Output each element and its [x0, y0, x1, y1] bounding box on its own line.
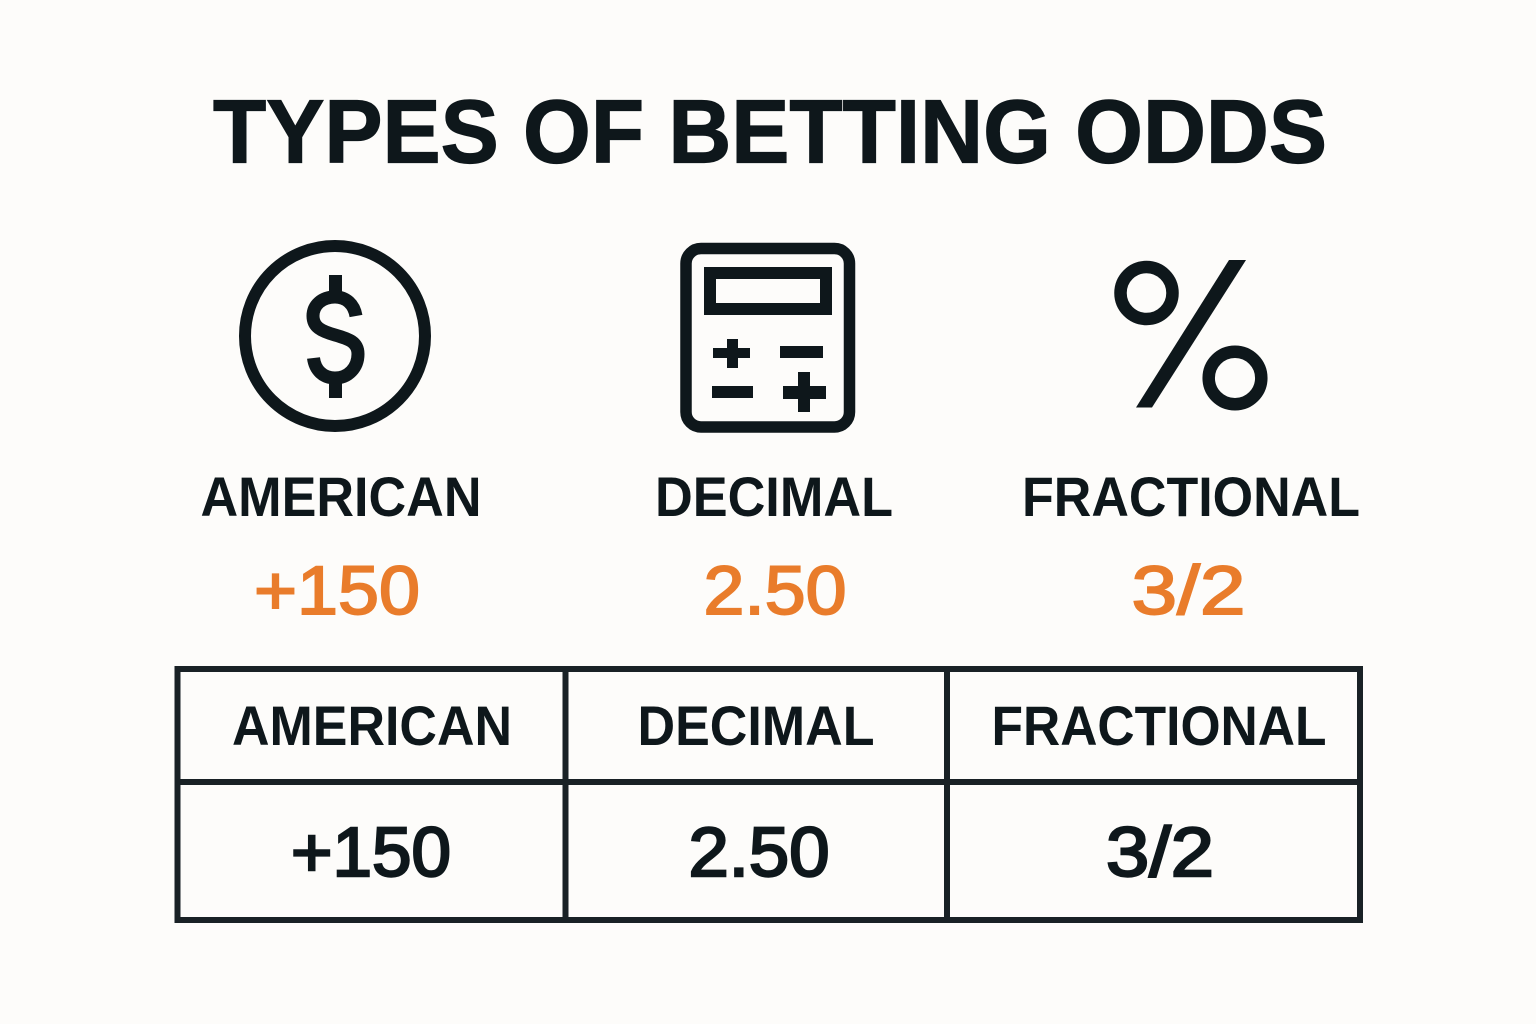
label: decimal: DECIMAL — [655, 465, 893, 528]
label: american: AMERICAN — [200, 465, 482, 528]
value: fractional: 3/2 — [1132, 552, 1246, 629]
icon: dollar coin — [245, 246, 425, 426]
table header: fractional: FRACTIONAL — [992, 694, 1326, 757]
value: decimal: 2.50 — [704, 552, 846, 629]
icon: percent — [1120, 260, 1261, 408]
value: american: +150 — [254, 552, 420, 629]
table value: decimal: 2.50 — [688, 813, 830, 891]
label: fractional: FRACTIONAL — [1022, 465, 1360, 528]
comparison table — [177, 669, 1360, 920]
icon: calculator — [686, 248, 850, 427]
title: TYPES OF BETTING ODDS — [213, 82, 1327, 182]
table value: american: +150 — [291, 813, 451, 891]
table value: fractional: 3/2 — [1106, 813, 1214, 891]
table header: decimal: DECIMAL — [638, 694, 874, 757]
table header: american: AMERICAN — [232, 694, 512, 757]
